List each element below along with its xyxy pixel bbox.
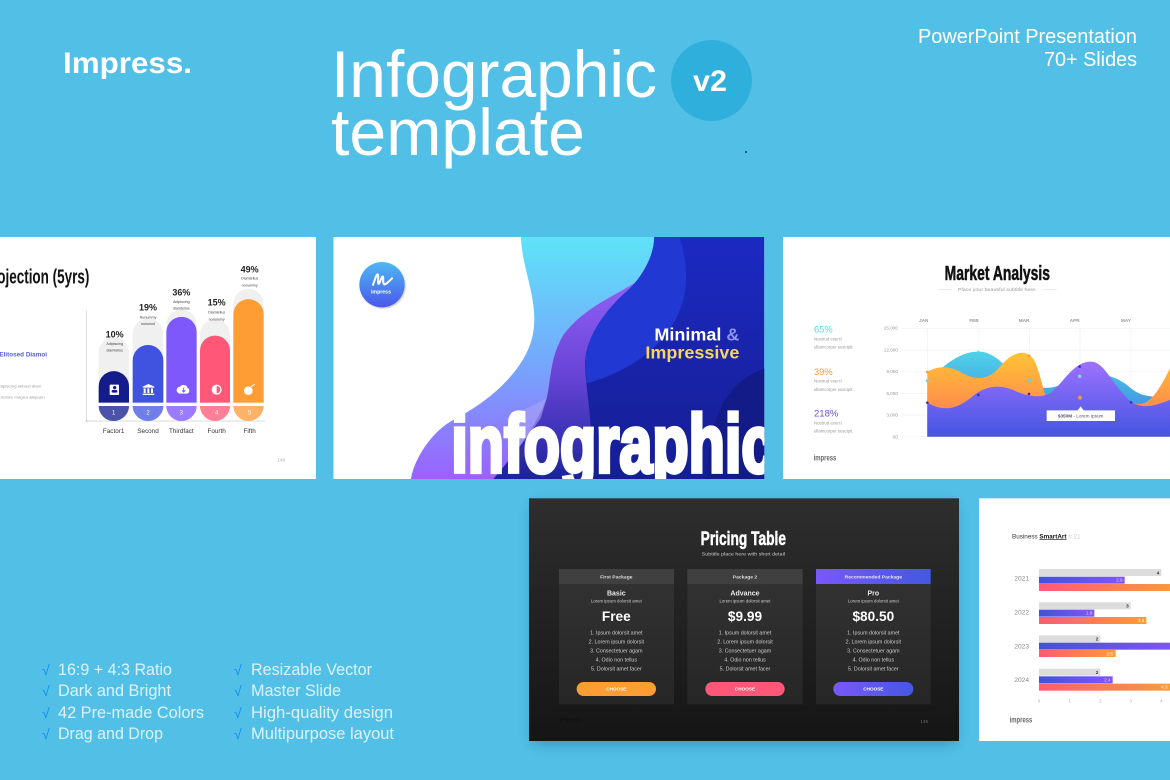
main title xyxy=(331,37,657,169)
wave highlight xyxy=(507,398,547,448)
card: advance: CHOOSE xyxy=(735,686,755,691)
feature list: right column: Multipurpose layout xyxy=(251,724,394,743)
card: pro: CHOOSE xyxy=(863,686,883,691)
feature list: right column: √ xyxy=(234,705,242,721)
bars 2022: 3 xyxy=(1126,604,1129,609)
stat: 65%: ullamcorper suscipit. xyxy=(814,344,853,349)
card: pro: 4. Odio non tellus xyxy=(853,657,894,663)
bars 2021: 4 xyxy=(1157,570,1160,575)
card: pro: 1. Ipsum dolorsit amet xyxy=(847,630,900,636)
card: advance: 4. Odio non tellus xyxy=(724,657,766,663)
brand mark: impress xyxy=(560,715,582,724)
card: advance: 1. Ipsum dolorsit amet xyxy=(719,630,772,636)
wave: inner bright blue xyxy=(585,237,686,383)
card: advance xyxy=(687,569,803,704)
category labels: Second xyxy=(137,428,159,435)
bar 4: Diamtellus xyxy=(208,311,225,315)
slide subtitle: Place your beautiful subtitle here. xyxy=(958,287,1037,293)
bar 3: diamtellus xyxy=(173,307,190,311)
card: basic: 2. Lorem ipsum dolorsit xyxy=(589,639,645,645)
axis labels: 1 xyxy=(1068,699,1071,704)
card: advance: 5. Dolorsit amet facer xyxy=(720,666,771,672)
feature list: left column: 16:9 + 4:3 Ratio xyxy=(58,660,172,679)
feature list: right column: √ xyxy=(234,662,242,678)
bars 2022: 1.8 xyxy=(1086,611,1093,616)
bar 5: 49% xyxy=(241,264,259,274)
product summary xyxy=(918,26,1137,71)
feature list: left column: 42 Pre-made Colors xyxy=(58,703,204,722)
area chart: 3,000 xyxy=(886,413,898,418)
slide subtitle xyxy=(938,288,1057,292)
axis labels: 4 xyxy=(1160,699,1163,704)
chart axes xyxy=(86,310,265,422)
area chart: 6,000 xyxy=(886,391,898,396)
brand mark: impress xyxy=(1010,716,1033,725)
tagline: Minimal & xyxy=(654,324,739,344)
bar 1: 1 xyxy=(112,410,116,416)
card: basic: 4. Odio non tellus xyxy=(596,657,637,663)
product summary: PowerPoint Presentation xyxy=(918,26,1137,48)
stat: 65%: 65% xyxy=(814,324,833,334)
bar 1: Adipiscing xyxy=(106,342,123,346)
product summary: 70+ Slides xyxy=(1044,49,1137,71)
chart tooltip: $350M - Lorem Ipsum xyxy=(1058,413,1104,418)
stat: 39% xyxy=(814,367,853,392)
area chart: MAR xyxy=(1019,318,1030,323)
axis labels: 2 xyxy=(1099,699,1102,704)
category labels: Fourth xyxy=(208,428,226,435)
card: basic: 1. Ipsum dolorsit amet xyxy=(590,630,643,636)
slide heading: Business SmartArt # 21 xyxy=(1012,533,1081,540)
bar 3: 36% xyxy=(172,287,190,297)
card: basic: Basic xyxy=(607,591,626,598)
stat: 218%: 218% xyxy=(814,408,838,418)
axis labels: 0 xyxy=(1038,699,1041,704)
area chart: 15,000 xyxy=(884,325,898,330)
wave: purple xyxy=(494,282,635,479)
feature list: right column xyxy=(234,660,394,743)
feature list: left column: √ xyxy=(42,726,50,742)
bar 4: nonummy xyxy=(209,317,225,321)
version badge xyxy=(671,40,752,121)
feature list: left column: √ xyxy=(42,662,50,678)
slide subtitle: Subtitle place here with short detail xyxy=(702,551,785,557)
chart tooltip xyxy=(1047,406,1115,421)
stat: 39%: Nostrud exerci xyxy=(814,379,842,384)
bar 5: 5 xyxy=(248,410,252,416)
card: advance: Package 2 xyxy=(733,574,757,580)
big word: infographic xyxy=(451,399,774,490)
card: basic: Free xyxy=(602,609,631,624)
axis labels xyxy=(1038,700,1162,702)
category labels xyxy=(103,428,256,433)
bars 2024: 4.3 xyxy=(1161,685,1168,690)
tagline: Impressive xyxy=(645,343,739,363)
brand name: Impress. xyxy=(63,47,192,80)
card: advance: Advance xyxy=(730,591,760,598)
bars 2022 xyxy=(1039,602,1146,624)
slide: business bar chart xyxy=(979,498,1170,741)
feature list: right column: High-quality design xyxy=(251,703,393,722)
side text: dolore magna aliquam xyxy=(1,395,45,400)
logo badge: impress xyxy=(371,289,391,295)
stat: 218%: Nostrud exerci xyxy=(814,420,842,425)
feature list: left column: √ xyxy=(42,705,50,721)
bars 2024 xyxy=(1039,669,1170,691)
version badge: v2 xyxy=(693,65,727,98)
category labels: Fifth xyxy=(244,428,256,435)
area chart: 9,000 xyxy=(886,369,898,374)
bars 2021: 2.8 xyxy=(1116,578,1123,583)
card: basic: 3. Consectetuer agam xyxy=(590,648,643,654)
feature list: right column: √ xyxy=(234,726,242,742)
feature list: left column: Dark and Bright xyxy=(58,681,171,700)
slide heading: Pricing Table xyxy=(701,529,786,550)
bars 2024: 2.4 xyxy=(1104,677,1111,682)
slide: pricing table xyxy=(529,498,959,741)
bar 3: 3 xyxy=(180,410,184,416)
bars 2023: 2 xyxy=(1096,637,1099,642)
side text: dipiscing elitsed diam xyxy=(0,384,42,389)
slide shadow xyxy=(532,504,956,744)
feature list: right column: Resizable Vector xyxy=(251,660,372,679)
slide heading: Market Analysis xyxy=(945,263,1050,285)
stat: 218%: ullamcorper suscipit. xyxy=(814,428,853,433)
bar 1: 10% xyxy=(106,330,124,340)
card: pro: $80.50 xyxy=(852,609,895,624)
card: basic xyxy=(559,569,674,704)
area chart: MAY xyxy=(1121,318,1132,323)
bars 2023: 2.5 xyxy=(1107,651,1113,656)
year labels: 2023 xyxy=(1014,643,1029,650)
main title: template xyxy=(331,95,585,169)
card: advance: Lorem ipsum dolorsit amet xyxy=(719,599,771,604)
card: advance: $9.99 xyxy=(728,609,762,624)
side text xyxy=(0,353,47,400)
card: advance: 2. Lorem ipsum dolorsit xyxy=(717,639,773,645)
card: basic: CHOOSE xyxy=(606,686,626,691)
year labels: 2022 xyxy=(1014,609,1029,616)
bar 3: Adipiscing xyxy=(173,300,190,304)
card: advance: 3. Consectetuer agam xyxy=(719,648,772,654)
bars 2021 xyxy=(1039,569,1170,591)
side text: Elitosed Diamoi xyxy=(0,353,47,359)
card: pro xyxy=(816,569,931,704)
area chart: APR xyxy=(1070,318,1080,323)
slide: projection bar chart xyxy=(0,237,316,479)
area chart: 00 xyxy=(893,434,898,439)
page number: 146 xyxy=(277,457,286,462)
wave: dark blue xyxy=(585,237,764,479)
stat: 218% xyxy=(814,408,853,433)
year labels: 2021 xyxy=(1014,576,1029,583)
main title: Infographic xyxy=(331,37,657,111)
bars 2023 xyxy=(1039,635,1170,657)
tagline xyxy=(646,328,739,362)
feature list: left column xyxy=(42,660,204,743)
bar 2 xyxy=(133,303,163,421)
bar 1: diamtellus xyxy=(106,349,123,353)
page number: 136 xyxy=(920,719,929,724)
bar 2: euismod xyxy=(141,322,155,326)
card: pro: 5. Dolorsit amet facer xyxy=(848,666,899,672)
bars 2024: 2 xyxy=(1096,670,1099,675)
wave: dark corner xyxy=(707,368,764,479)
category labels: Thirdfact xyxy=(169,428,194,435)
card: pro: Lorem ipsum dolorsit amet xyxy=(848,599,900,604)
stat: 65%: Nostrud exerci xyxy=(814,336,842,341)
axis labels: 3 xyxy=(1129,699,1132,704)
feature list: left column: Drag and Drop xyxy=(58,724,163,743)
bar 2: 2 xyxy=(146,410,150,416)
year labels: 2024 xyxy=(1014,677,1029,684)
bar 2: Nunummy xyxy=(140,316,156,320)
area chart: 12,000 xyxy=(884,347,898,352)
feature list: right column: Master Slide xyxy=(251,681,341,700)
bar 5: nonummy xyxy=(242,283,258,287)
wave: light gradient xyxy=(411,237,663,479)
bar 5 xyxy=(233,264,264,421)
bar 4: 15% xyxy=(208,298,226,308)
year labels xyxy=(1014,576,1029,684)
card: pro: Pro xyxy=(868,591,879,598)
area chart: JAN xyxy=(919,318,929,323)
bar 1 xyxy=(99,330,129,421)
area chart xyxy=(884,318,1170,439)
category labels: Factor1 xyxy=(103,428,125,435)
area chart: FEB xyxy=(969,318,979,323)
card: basic: Lorem ipsum dolorsit amet xyxy=(591,599,643,604)
card: pro: 3. Consectetuer agam xyxy=(847,648,900,654)
stat: 39%: ullamcorper suscipit. xyxy=(814,387,853,392)
brand mark: impress xyxy=(814,454,837,463)
bar 3 xyxy=(166,287,197,421)
feature list: left column: √ xyxy=(42,683,50,699)
bars 2022: 3.5 xyxy=(1138,618,1145,623)
bar 5: Diamtellus xyxy=(241,277,258,281)
card: basic: 5. Dolorsit amet facer xyxy=(591,666,642,672)
bar 4: 4 xyxy=(215,410,219,416)
bar 2: 19% xyxy=(139,303,157,313)
stat: 65% xyxy=(814,324,853,349)
stat: 39%: 39% xyxy=(814,367,833,377)
feature list: right column: √ xyxy=(234,683,242,699)
bar 4 xyxy=(200,298,230,421)
logo badge xyxy=(359,262,406,309)
card: pro: 2. Lorem ipsum dolorsit xyxy=(846,639,902,645)
slide: market analysis xyxy=(783,237,1170,479)
card: basic: First Package xyxy=(600,574,633,580)
card: pro: Recommended Package xyxy=(845,574,902,580)
slide: infographic cover xyxy=(333,237,774,490)
